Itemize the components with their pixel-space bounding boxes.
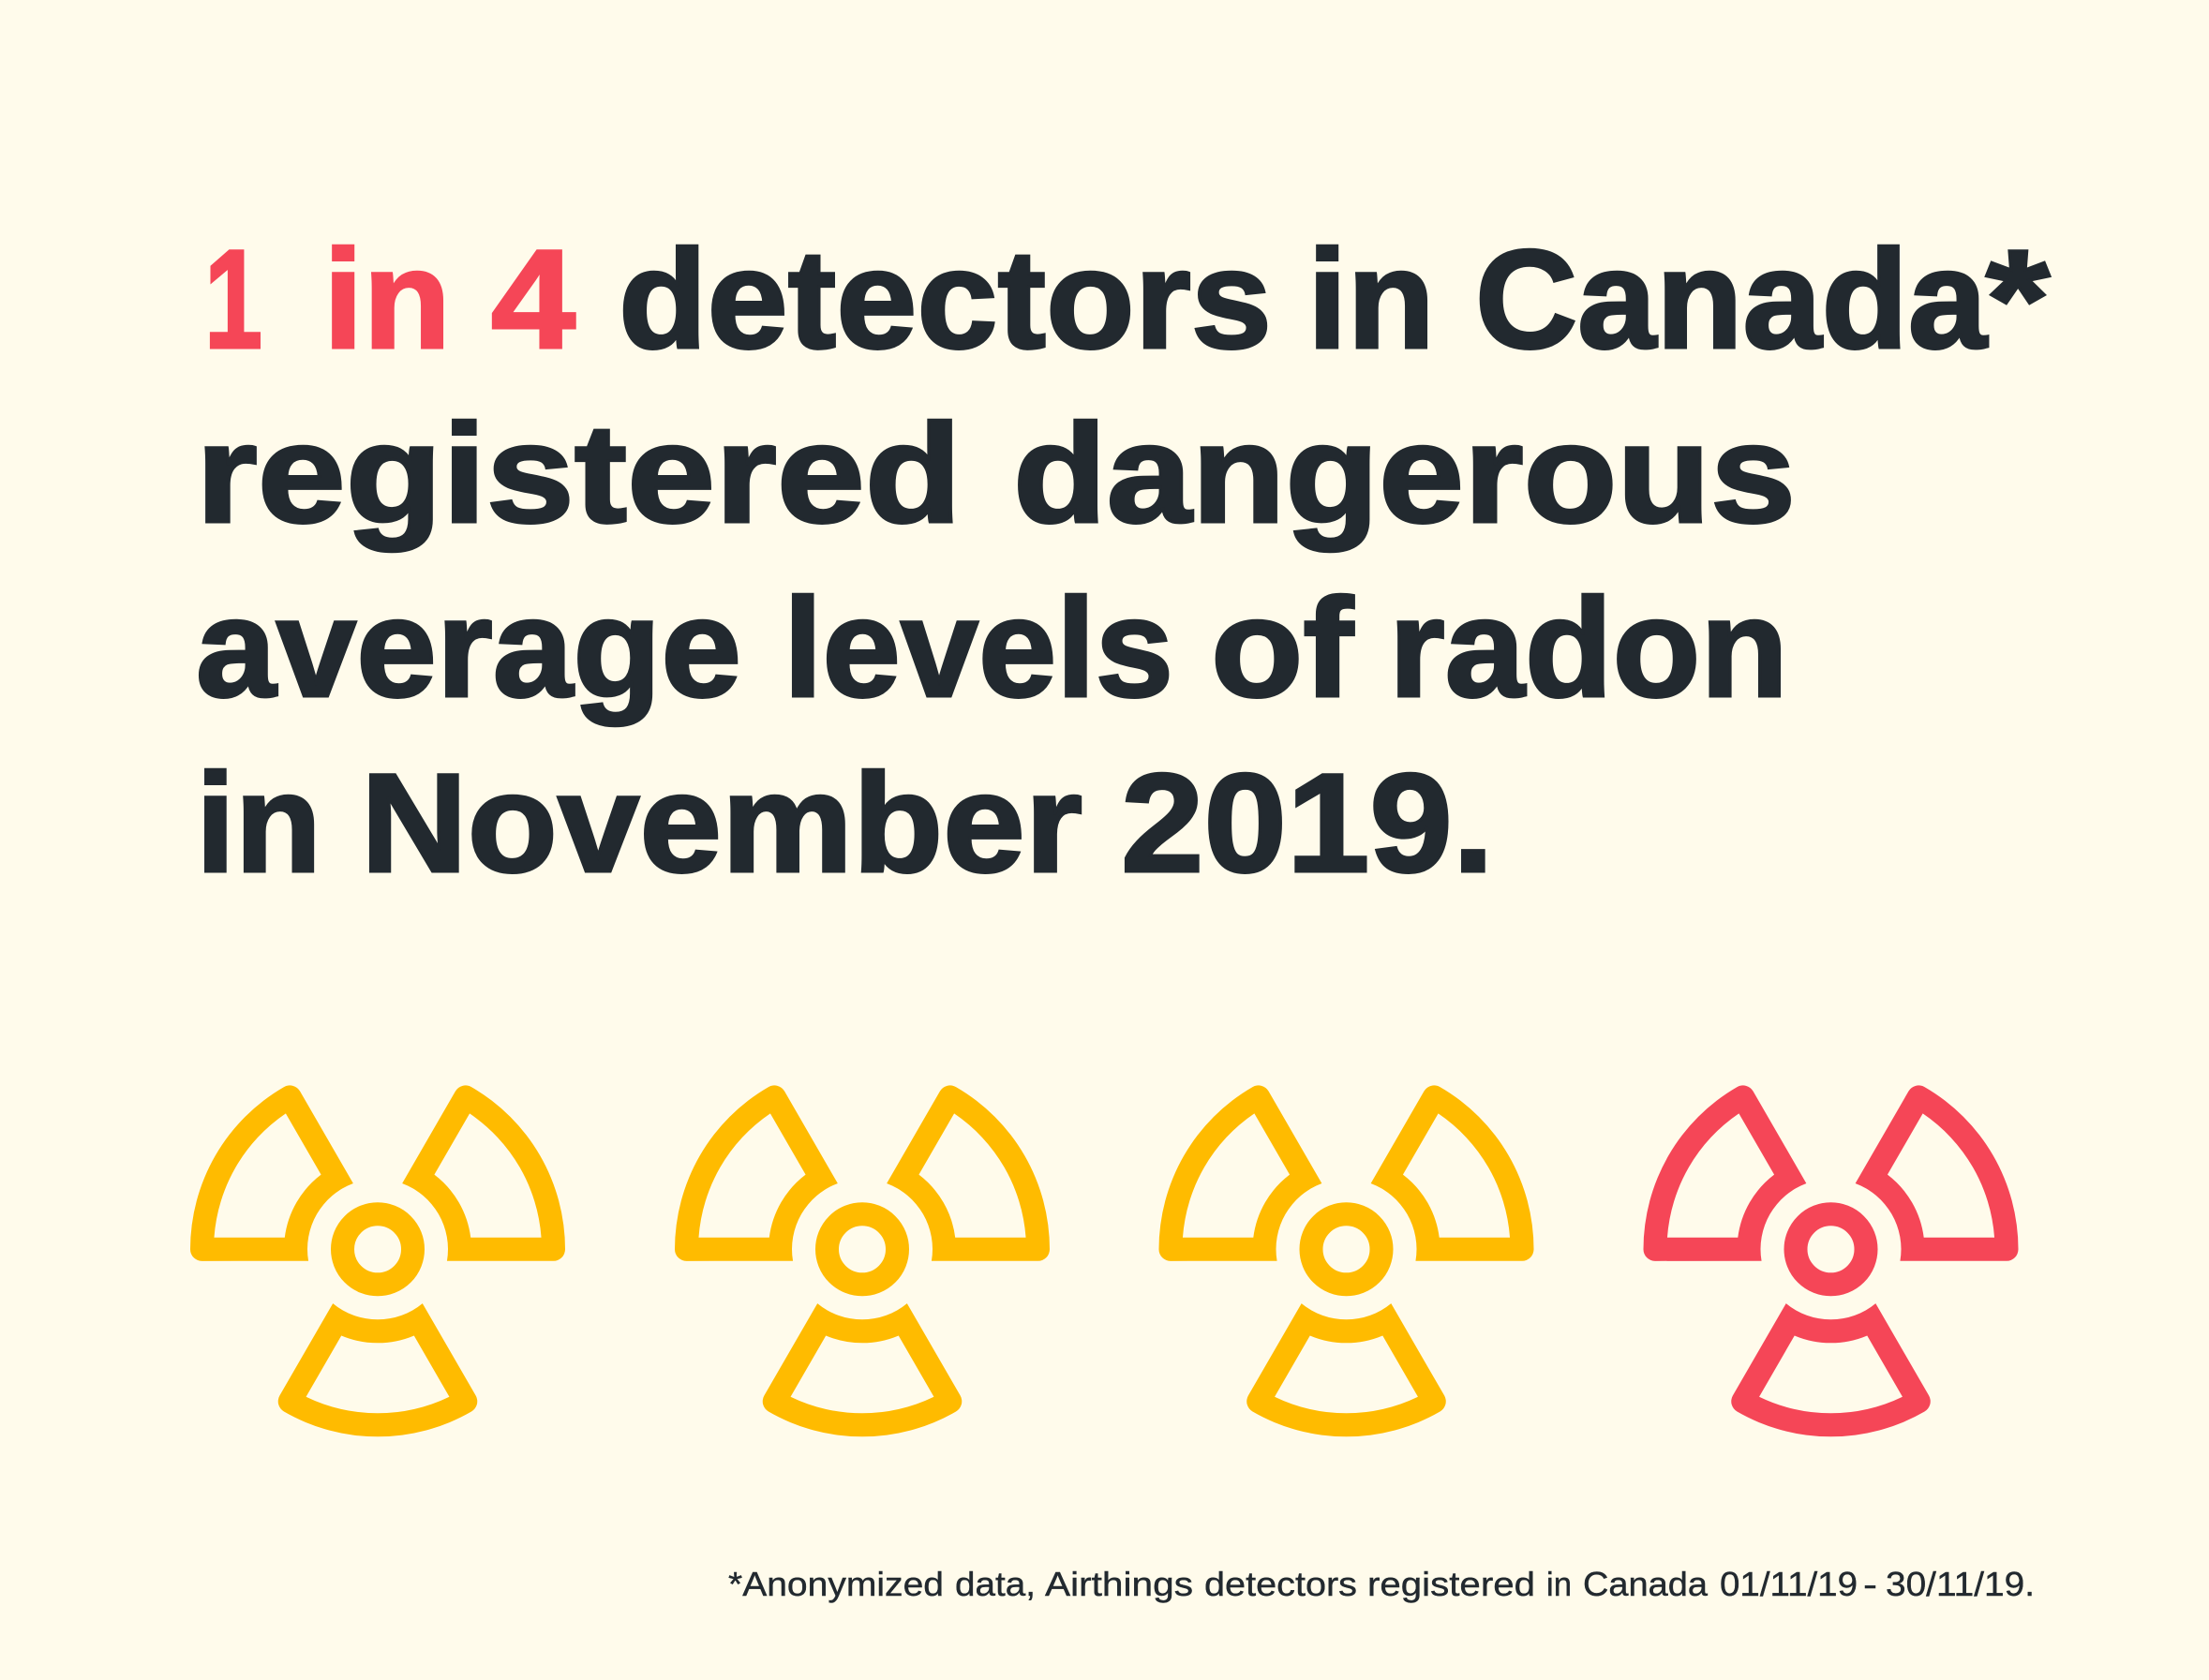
footnote: in (1546, 1565, 1572, 1603)
title line 2 (196, 394, 1796, 552)
icon: radiation symbol 1 yellow (142, 1081, 565, 1494)
title line 4: 2019. (1121, 744, 1494, 901)
footnote: Canada (1583, 1565, 1709, 1603)
footnote (728, 1565, 2035, 1603)
title line 1: Canada (1475, 220, 1989, 378)
footnote: *Anonymized (728, 1565, 944, 1603)
title line 4: in (196, 744, 321, 901)
footnote: 30/11/19. (1886, 1565, 2035, 1603)
title (196, 220, 2051, 901)
title line 4: November (361, 744, 1082, 901)
title line 3 (196, 569, 1788, 726)
title line 1: 1 (204, 220, 262, 378)
title line 1 (204, 220, 2051, 378)
icon: radiation symbol 4 red (1595, 1081, 2019, 1494)
icons row: radiation symbols, 3 yellow and 1 red (142, 1081, 2018, 1494)
title line 3: radon (1389, 569, 1788, 726)
footnote: registered (1367, 1565, 1535, 1603)
icon: radiation symbol 3 yellow (1111, 1081, 1533, 1494)
footnote: Airthings (1045, 1565, 1193, 1603)
title line 3: average (196, 569, 741, 726)
footnote: data, (955, 1565, 1036, 1603)
title line 1: in (1307, 220, 1435, 378)
footnote: 01/11/19 (1720, 1565, 1858, 1603)
footnote: detectors (1204, 1565, 1357, 1603)
footnote: - (1863, 1565, 1877, 1603)
title line 1: 4 (491, 220, 575, 378)
icon: radiation symbol 2 yellow (627, 1081, 1050, 1494)
title line 4 (196, 744, 1494, 901)
title line 3: levels (784, 569, 1173, 726)
title line 2: dangerous (1013, 394, 1796, 552)
title line 1: in (323, 220, 451, 378)
title line 1: detectors (619, 220, 1272, 378)
title line 1: * (1986, 220, 2051, 378)
title line 2: registered (196, 394, 962, 552)
title line 3: of (1211, 569, 1354, 726)
